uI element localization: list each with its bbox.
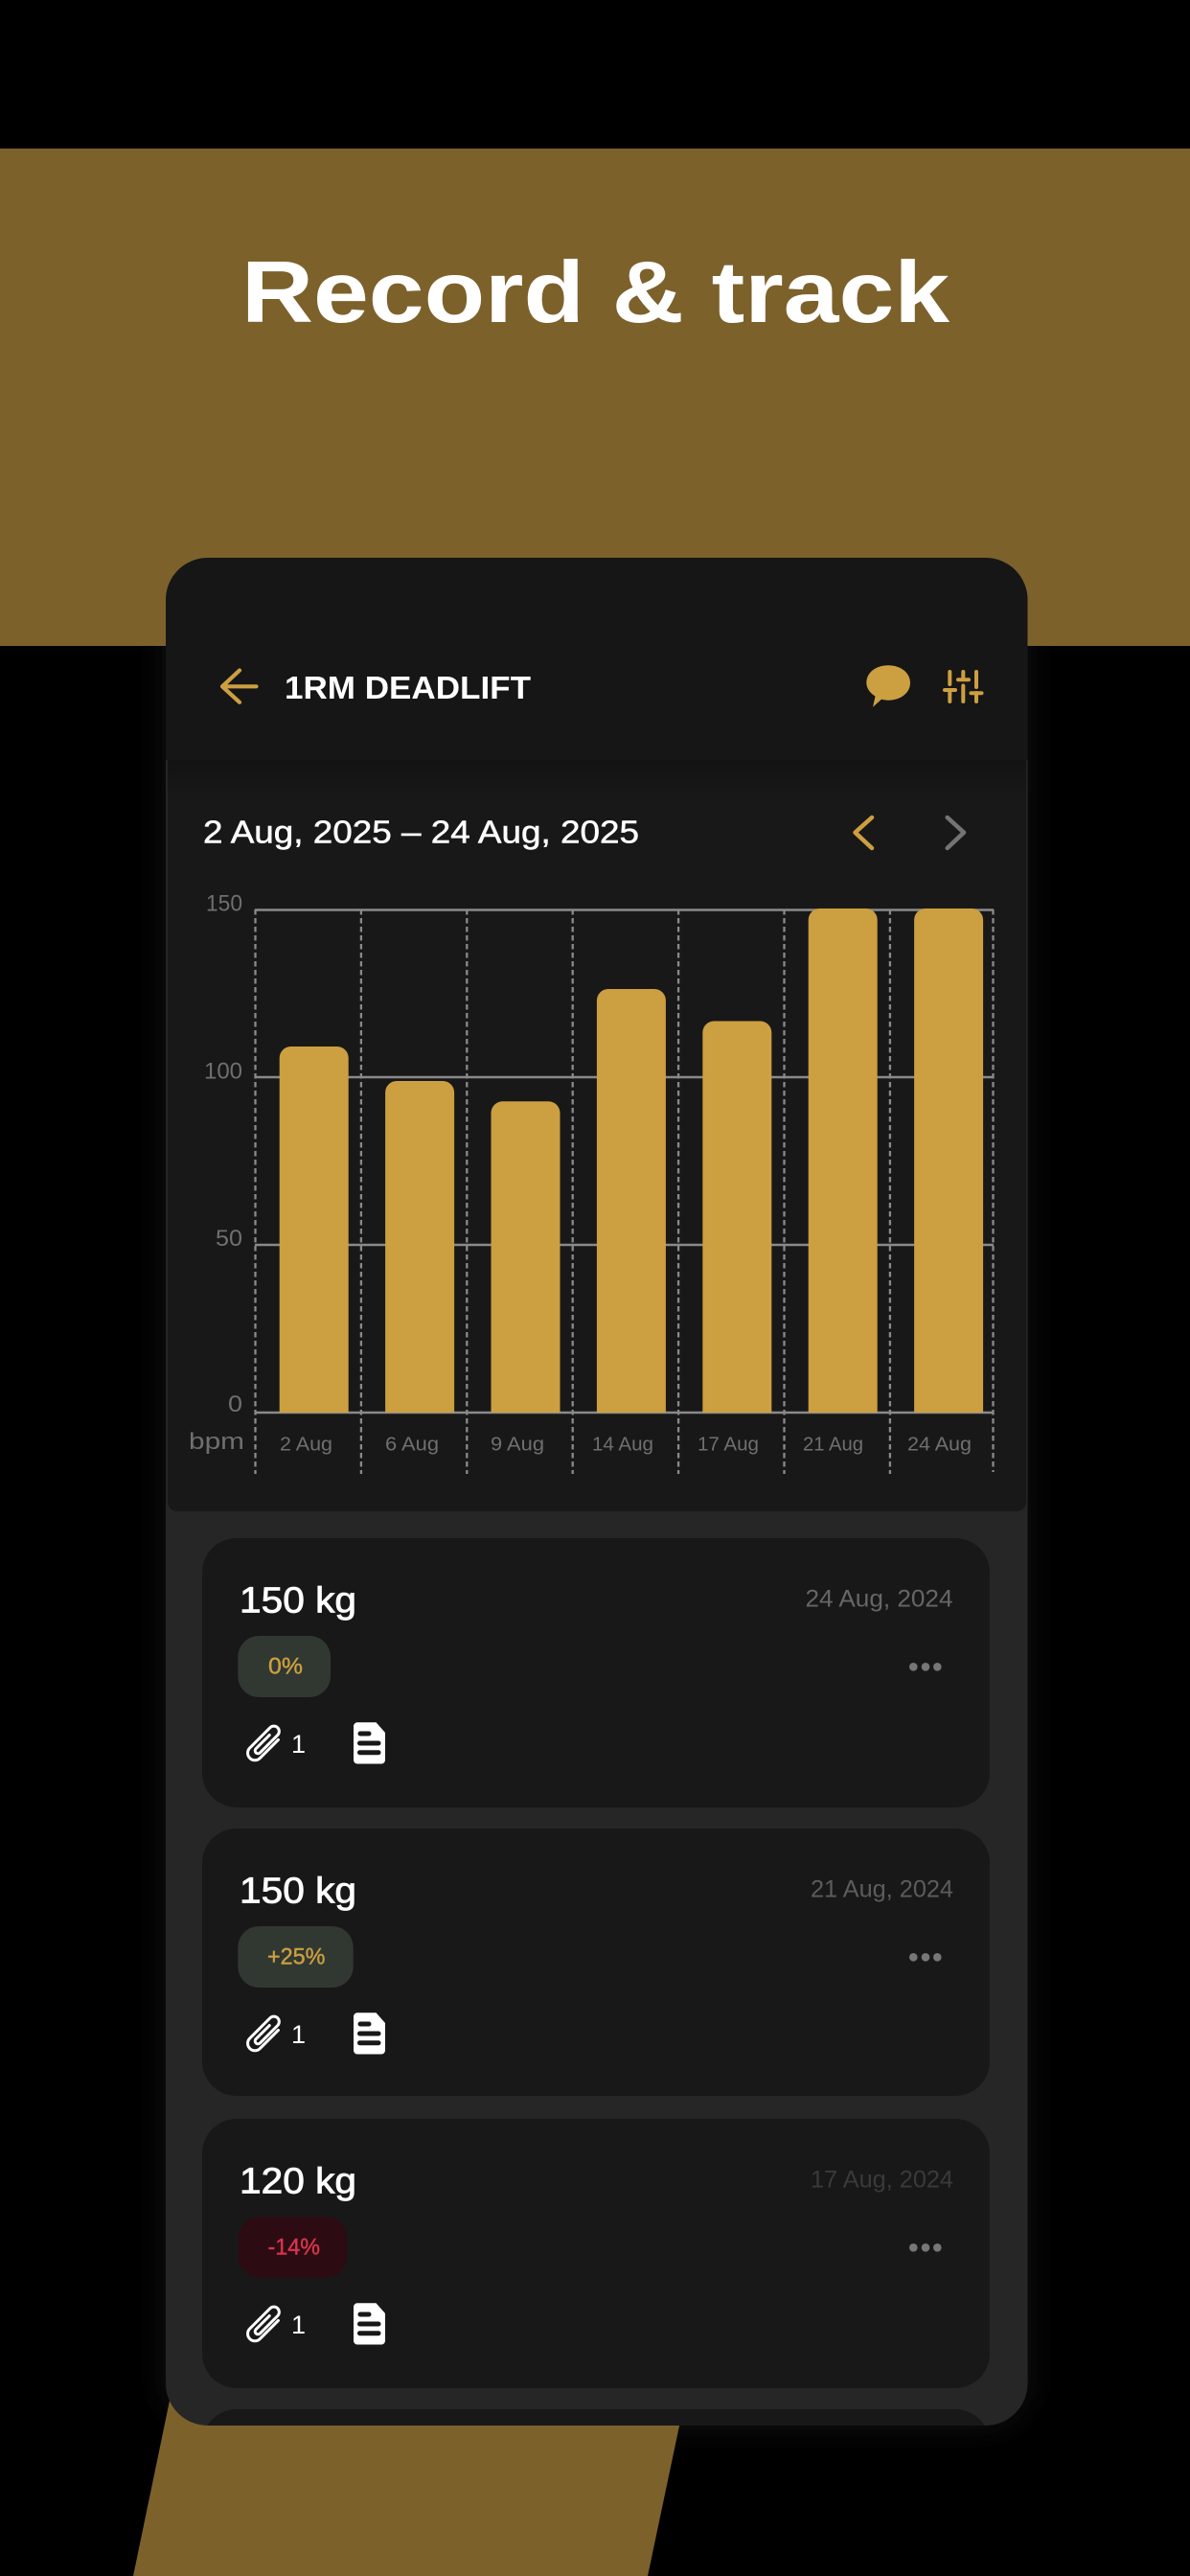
icon: paperclip	[246, 1725, 281, 1761]
x-axis labels	[281, 1438, 971, 1455]
menu dots	[909, 1663, 942, 1671]
icon: back arrow	[222, 671, 257, 702]
date: 24 Aug, 2024	[805, 1586, 953, 1613]
badge	[238, 1636, 331, 1697]
attachment count: 1	[291, 2311, 306, 2339]
background band	[0, 149, 1190, 646]
weight: 150 kg	[240, 1871, 356, 1911]
icon: filter sliders	[945, 672, 981, 702]
record card: 24 Aug	[202, 1538, 990, 1807]
y-axis labels: 0	[228, 1392, 242, 1417]
icon: previous chevron	[855, 817, 872, 848]
icon: speech bubble	[866, 665, 910, 707]
bar chart	[189, 891, 994, 1474]
menu dots	[909, 1953, 942, 1962]
menu dots	[909, 2243, 942, 2252]
bars	[280, 908, 983, 1413]
badge: +25%	[267, 1944, 326, 1970]
y-axis labels: 50	[216, 1226, 242, 1252]
x-axis labels: 24 Aug	[907, 1434, 972, 1455]
clipped next card	[207, 2409, 985, 2426]
record card: 21 Aug	[202, 1828, 990, 2096]
chart panel	[168, 760, 1026, 1511]
background lower slanted shape	[133, 2271, 712, 2576]
icon: document	[354, 1722, 385, 1763]
icon: next chevron	[948, 817, 964, 848]
date: 17 Aug, 2024	[811, 2167, 953, 2194]
title: Record & track	[241, 244, 950, 341]
x-axis labels: 21 Aug	[803, 1434, 863, 1455]
x-axis labels: 2 Aug	[280, 1434, 332, 1455]
y-axis labels: 150	[206, 891, 242, 917]
y-axis labels: bpm	[189, 1429, 244, 1455]
icon: document	[354, 2012, 385, 2055]
badge: 0%	[268, 1654, 303, 1680]
attachment count: 1	[291, 2020, 306, 2049]
badge	[239, 2217, 347, 2278]
y-axis labels	[189, 891, 244, 1455]
icon: document	[354, 2303, 385, 2344]
icon: paperclip	[246, 2306, 281, 2342]
phone screen	[166, 558, 1028, 2576]
record card: 17 Aug	[202, 2119, 990, 2388]
attachment count: 1	[291, 1730, 306, 1759]
screen heading: 1RM DEADLIFT	[285, 670, 531, 705]
x-axis labels: 14 Aug	[592, 1434, 653, 1455]
weight: 150 kg	[240, 1580, 356, 1621]
x-axis labels: 6 Aug	[385, 1434, 439, 1455]
badge	[238, 1926, 354, 1988]
badge: -14%	[268, 2235, 320, 2261]
icon: paperclip	[246, 2014, 281, 2053]
date: 21 Aug, 2024	[811, 1876, 953, 1903]
date range: 2 Aug, 2025 – 24 Aug, 2025	[203, 814, 639, 849]
y-axis labels: 100	[204, 1059, 242, 1085]
x-axis labels: 9 Aug	[491, 1434, 544, 1455]
app header	[166, 558, 1028, 760]
weight: 120 kg	[240, 2161, 356, 2201]
x-axis labels: 17 Aug	[698, 1434, 759, 1455]
